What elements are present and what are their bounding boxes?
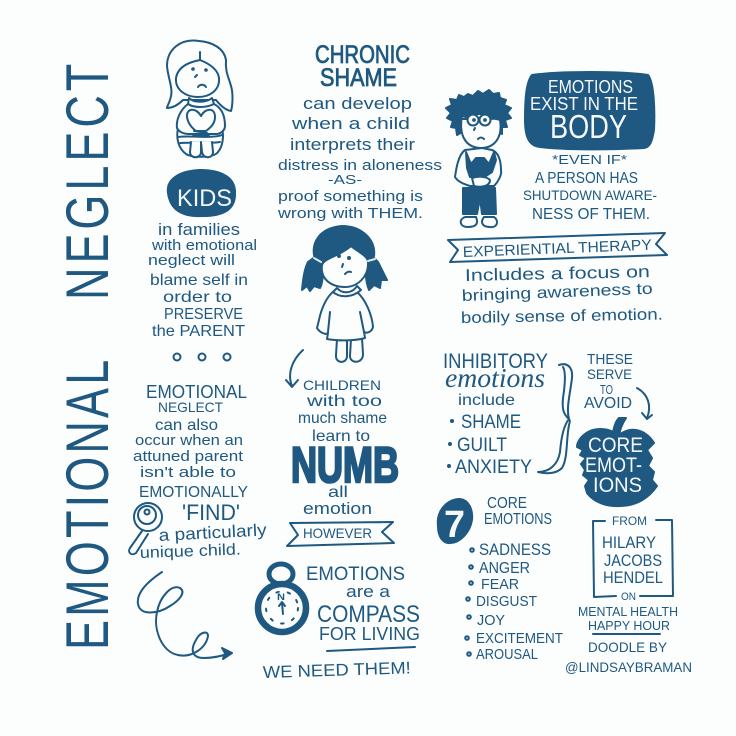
text block: emotional neglect can also occur xyxy=(133,382,268,562)
text block: experiential therapy description: Includes a focus on xyxy=(465,262,650,285)
icon: bitten apple core emotions: EMOT- xyxy=(585,454,642,477)
credit box: from hilary jacobs hendel: HENDEL xyxy=(603,568,663,587)
arrow: squiggle xyxy=(138,572,232,659)
text block: mental health happy hour credit: MENTAL HEALTH xyxy=(578,604,678,619)
text block: emotional neglect can also occur: attuned parent xyxy=(133,448,244,465)
banner: however xyxy=(287,522,394,546)
badge: number 7 xyxy=(438,499,472,546)
heading: chronic shame: SHAME xyxy=(320,64,397,92)
text block: we need them: WE NEED THEM! xyxy=(263,658,411,682)
text block: even if: NESS OF THEM. xyxy=(532,206,650,223)
text block: inhibitory emotions: GUILT xyxy=(457,435,507,456)
text block: chronic shame: can develop xyxy=(303,94,412,113)
banner: experiential therapy: EXPERIENTIAL THERAPY xyxy=(463,237,652,261)
title: emotional neglect xyxy=(55,64,122,650)
text block: inhibitory emotions xyxy=(443,350,548,478)
text block: chronic shame: distress in aloneness xyxy=(278,157,442,174)
text block: emotional neglect can also occur: occur when an xyxy=(135,432,243,449)
text block: emotional neglect can also occur: a particularly xyxy=(158,520,268,545)
heading: core emotions: EMOTIONS xyxy=(484,511,552,528)
arrow: girl to children text xyxy=(286,350,303,387)
list: seven core emotions: JOY xyxy=(477,612,505,629)
icon: boy with glasses xyxy=(446,90,511,227)
text block: all emotion: all xyxy=(328,484,348,501)
text block: kids in families: order to xyxy=(163,289,232,306)
list: seven core emotions: AROUSAL xyxy=(476,646,538,663)
icon: curly brace xyxy=(538,364,572,473)
icon: compass xyxy=(258,564,306,632)
heading: numb: NUMB xyxy=(291,437,399,493)
text block: kids in families: in families xyxy=(158,220,240,239)
text block: kids in families xyxy=(148,220,257,340)
title: emotional neglect: EMOTIONAL xyxy=(55,360,122,650)
credit box: from hilary jacobs hendel: ON xyxy=(621,591,636,603)
text block: children with too much shame: much shame xyxy=(298,410,387,427)
three dots xyxy=(174,354,230,360)
text block: chronic shame: wrong with THEM. xyxy=(277,205,423,222)
text block: kids in families: neglect will xyxy=(148,252,235,269)
text block: emotional neglect can also occur: isn't able to xyxy=(140,464,236,481)
badge: kids xyxy=(168,170,235,216)
text block: chronic shame: -AS- xyxy=(328,172,362,187)
text block: emotions are a compass: EMOTIONS xyxy=(306,564,405,585)
text block: children with too much shame: with too xyxy=(306,393,382,410)
text block: experiential therapy description: bringing awareness to xyxy=(462,281,653,305)
credit box: from hilary jacobs hendel: HILARY xyxy=(602,533,656,552)
text block: inhibitory emotions: emotions xyxy=(445,363,545,393)
list: seven core emotions: SADNESS xyxy=(479,540,551,559)
text block: mental health happy hour credit: DOODLE BY xyxy=(588,639,668,655)
banner: however: HOWEVER xyxy=(303,525,372,541)
text block: children with too much shame: learn to xyxy=(312,428,370,445)
text block: inhibitory emotions: ANXIETY xyxy=(455,457,532,478)
text block: these serve to avoid: AVOID xyxy=(584,395,632,412)
badge: number 7: 7 xyxy=(444,504,465,546)
text block: kids in families: the PARENT xyxy=(152,323,245,340)
text block: kids in families: with emotional xyxy=(151,237,257,254)
credit box: from hilary jacobs hendel xyxy=(593,514,673,603)
list: seven core emotions: ANGER xyxy=(479,560,530,577)
text block: all emotion: emotion xyxy=(303,499,372,518)
text block: mental health happy hour credit xyxy=(565,604,692,675)
heading: core emotions: CORE xyxy=(487,495,527,512)
text block: emotional neglect can also occur: NEGLECT xyxy=(158,399,223,415)
arrow: to core emotions xyxy=(637,388,652,419)
text block: chronic shame: when a child xyxy=(291,114,410,133)
text block: experiential therapy description xyxy=(461,262,663,327)
text block: emotional neglect can also occur: EMOTIONAL xyxy=(146,382,247,402)
title: emotional neglect: NEGLECT xyxy=(55,64,122,300)
text block: inhibitory emotions: include xyxy=(458,392,515,409)
text block: mental health happy hour credit: HAPPY HOUR xyxy=(588,618,670,633)
text block: these serve to avoid xyxy=(584,351,633,412)
credit box: from hilary jacobs hendel: JACOBS xyxy=(604,551,662,570)
list: seven core emotions: DISGUST xyxy=(476,593,537,610)
badge: kids: KIDS xyxy=(177,185,232,212)
text block: these serve to avoid: TO xyxy=(600,382,613,397)
text block: even if: A PERSON HAS xyxy=(535,170,638,187)
text block: chronic shame: proof something is xyxy=(278,188,423,205)
icon: sad child hugging knees xyxy=(167,41,232,157)
icon: bitten apple core emotions xyxy=(577,418,657,506)
text block: emotions are a compass xyxy=(306,564,420,651)
list: seven core emotions: EXCITEMENT xyxy=(476,630,563,647)
text block: emotions are a compass: COMPASS xyxy=(317,601,420,628)
text block: all emotion xyxy=(303,484,372,518)
text block: these serve to avoid: SERVE xyxy=(587,366,632,382)
text block: kids in families: PRESERVE xyxy=(164,306,243,323)
text block: kids in families: blame self in xyxy=(150,272,248,289)
list: seven core emotions: FEAR xyxy=(481,576,519,593)
text block: inhibitory emotions: SHAME xyxy=(461,412,521,433)
icon: girl with pigtails xyxy=(302,226,387,362)
text block: emotions are a compass: are a xyxy=(346,582,391,601)
heading: chronic shame xyxy=(315,41,410,92)
banner: experiential therapy xyxy=(448,233,667,262)
text block: emotional neglect can also occur: unique child. xyxy=(140,541,241,562)
heading: core emotions xyxy=(484,495,552,528)
badge: emotions exist in the body: EXIST IN THE xyxy=(530,94,638,114)
text block: even if xyxy=(523,152,657,223)
heading: chronic shame: CHRONIC xyxy=(315,41,410,69)
text block: emotions are a compass: FOR LIVING xyxy=(319,624,420,644)
badge: emotions exist in the body: EMOTIONS xyxy=(548,77,633,97)
badge: emotions exist in the body xyxy=(525,72,654,149)
icon: magnifying glass xyxy=(129,503,162,554)
text block: experiential therapy description: bodily sense of emotion. xyxy=(461,306,663,327)
icon: bitten apple core emotions: CORE xyxy=(588,434,643,457)
text block: these serve to avoid: THESE xyxy=(587,351,633,368)
badge: emotions exist in the body: BODY xyxy=(550,108,627,145)
text block: mental health happy hour credit: @LINDSAYBRAMAN xyxy=(565,659,692,675)
text block: chronic shame xyxy=(277,94,442,222)
text block: emotional neglect can also occur: can also xyxy=(155,417,218,434)
text block: emotional neglect can also occur: EMOTIONALLY xyxy=(139,484,248,501)
text block: even if: SHUTDOWN AWARE- xyxy=(523,187,657,203)
text block: inhibitory emotions: INHIBITORY xyxy=(443,350,548,373)
credit box: from hilary jacobs hendel: FROM xyxy=(612,514,647,528)
list: seven core emotions xyxy=(465,540,563,663)
text block: children with too much shame: CHILDREN xyxy=(303,377,381,393)
text block: chronic shame: interprets their xyxy=(290,135,415,154)
icon: bitten apple core emotions: IONS xyxy=(593,474,642,497)
icon: compass: N xyxy=(277,592,285,602)
text block: even if: *EVEN IF* xyxy=(552,152,627,167)
text block: emotional neglect can also occur: 'FIND' xyxy=(182,500,240,525)
text block: children with too much shame xyxy=(298,377,387,445)
